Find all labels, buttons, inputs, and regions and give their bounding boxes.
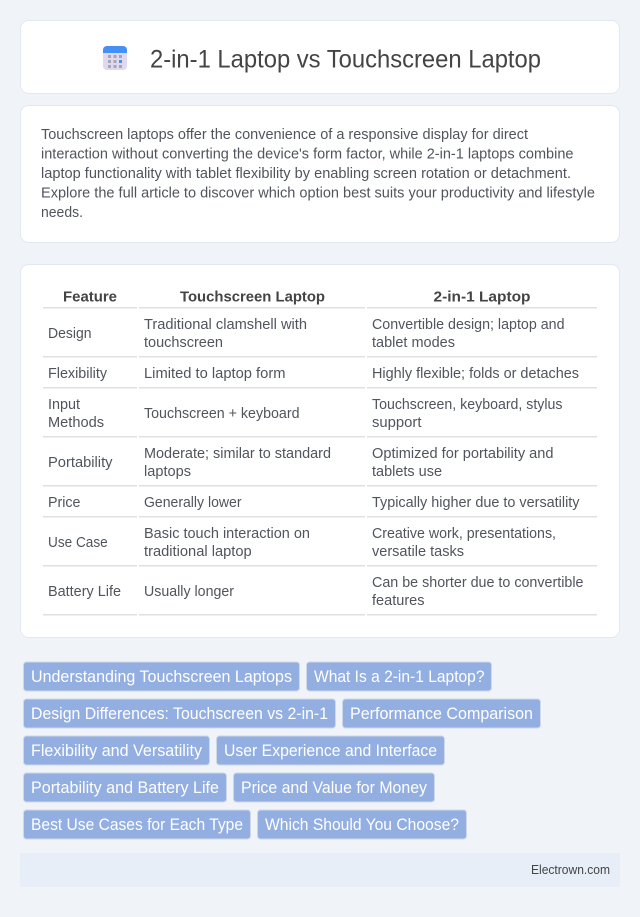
table row: Input Methods: Methods xyxy=(48,415,104,431)
intro text: Explore the full article to discover which option best suits your productivity and lifestyle xyxy=(41,184,595,202)
table row: Price: Price xyxy=(48,495,80,511)
panel: comparison table xyxy=(20,264,620,638)
intro text: Touchscreen laptops offer the convenience of a responsive display for direct xyxy=(41,126,529,143)
intro text: laptop functionality with tablet flexibility by enabling screen rotation or detachment. xyxy=(41,165,571,182)
table header row: 2-in-1 Laptop xyxy=(434,289,530,306)
tag: Design Differences: Design Differences: Touchscreen vs 2-in-1 xyxy=(31,705,328,723)
table header row xyxy=(43,289,597,308)
table row: Portability: tablets use xyxy=(372,464,442,480)
table row: Battery Life xyxy=(43,575,597,616)
table row: Flexibility: Limited to laptop form xyxy=(144,366,286,382)
tag: User Experience and Interface xyxy=(216,736,444,765)
table row: Portability: laptops xyxy=(144,464,191,480)
table row: Portability: Portability xyxy=(48,455,113,471)
table row: Input Methods: Input xyxy=(48,397,80,413)
table row: Use Case: Use Case xyxy=(48,535,108,551)
footer brand: Electrown.com xyxy=(531,862,610,877)
intro text: interaction without converting the device's form factor, while 2-in-1 laptops combine xyxy=(41,146,574,162)
table row: Flexibility: Highly flexible; folds or detaches xyxy=(372,366,579,382)
table row: Battery Life: Usually longer xyxy=(144,584,234,600)
tag: Which Should You Choose? xyxy=(258,810,466,839)
tag: Understanding Touchscreen Laptops: Understanding Touchscreen Laptops xyxy=(31,668,292,686)
table row: Input Methods: Touchscreen + keyboard xyxy=(144,406,300,422)
tag: Best Use Cases for Each Type: Best Use Cases for Each Type xyxy=(31,816,243,834)
table row: Flexibility: Flexibility xyxy=(48,366,108,382)
tag: Best Use Cases for Each Type xyxy=(24,810,250,839)
table row: Design: touchscreen xyxy=(144,335,223,351)
table header row: Touchscreen Laptop xyxy=(180,289,325,306)
table row: Use Case: Basic touch interaction on xyxy=(144,526,310,542)
tag: Which Should You Choose?: Which Should You Choose? xyxy=(265,816,459,834)
table row: Price xyxy=(43,495,597,518)
table row: Price: Generally lower xyxy=(144,495,242,511)
tag: User Experience and Interface: User Experience and Interface xyxy=(224,742,437,760)
table row: Portability: Optimized for portability and xyxy=(372,446,554,462)
table row: Design xyxy=(43,317,597,358)
table row: Input Methods xyxy=(43,397,597,438)
panel: introduction xyxy=(20,106,620,242)
tag: Portability and Battery Life xyxy=(24,773,226,802)
table row: Use Case: Creative work, presentations, xyxy=(372,526,556,542)
panel: header xyxy=(20,20,620,94)
table row: Battery Life: features xyxy=(372,593,424,609)
table row: Flexibility xyxy=(43,366,597,388)
table row: Input Methods: support xyxy=(372,415,422,431)
table row: Design: Convertible design; laptop and xyxy=(372,317,564,333)
tag: Flexibility and Versatility: Flexibility and Versatility xyxy=(31,742,203,760)
table row: Battery Life: Battery Life xyxy=(48,584,121,600)
tag: Design Differences xyxy=(24,699,336,728)
table row: Use Case xyxy=(43,526,597,566)
title: 2-in-1 Laptop vs Touchscreen Laptop xyxy=(150,46,541,74)
footer xyxy=(20,853,620,887)
table row: Portability xyxy=(43,446,597,486)
tag: What Is a 2-in-1 Laptop? xyxy=(306,662,492,691)
tag: Performance Comparison xyxy=(342,699,540,728)
table row: Price: Typically higher due to versatility xyxy=(372,495,580,511)
intro text: needs. xyxy=(41,204,83,221)
intro text xyxy=(41,126,595,221)
tag: What Is a 2-in-1 Laptop?: What Is a 2-in-1 Laptop? xyxy=(314,668,484,686)
table row: Portability: Moderate; similar to standard xyxy=(144,446,331,462)
tag: Understanding Touchscreen Laptops xyxy=(24,662,300,691)
tag: Flexibility and Versatility xyxy=(24,736,210,765)
table row: Input Methods: Touchscreen, keyboard, stylus xyxy=(372,397,562,413)
tag: Price and Value for Money: Price and Value for Money xyxy=(241,779,428,797)
tag: Performance Comparison: Performance Comparison xyxy=(350,705,533,723)
table row: Battery Life: Can be shorter due to convertible xyxy=(372,575,584,591)
table row: Use Case: traditional laptop xyxy=(144,544,252,560)
tag: Portability and Battery Life: Portability and Battery Life xyxy=(31,779,219,797)
table row: Design: Design xyxy=(48,326,92,342)
topic tags xyxy=(24,662,540,839)
tag: Price and Value for Money xyxy=(234,773,434,802)
table row: Design: tablet modes xyxy=(372,335,455,351)
table row: Design: Traditional clamshell with xyxy=(144,317,307,333)
table header row: Feature xyxy=(63,289,117,306)
table row: Use Case: versatile tasks xyxy=(372,544,464,560)
icon: calendar xyxy=(103,46,127,70)
